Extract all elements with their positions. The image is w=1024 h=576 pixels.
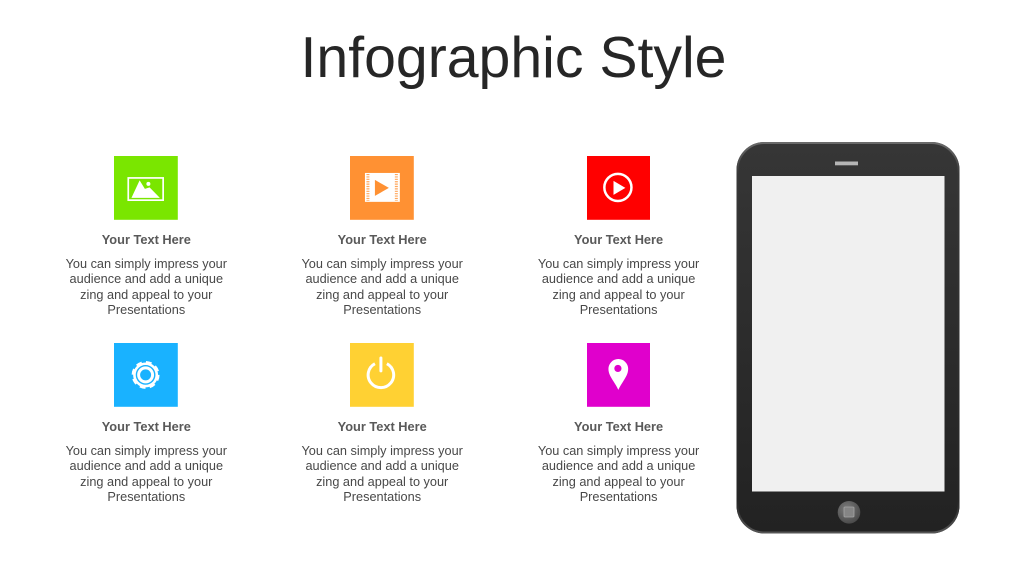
text block: zing and appeal to your [552, 287, 685, 302]
text block: audience and add a unique [542, 271, 695, 286]
text block [66, 443, 227, 504]
text block: You can simply impress your [301, 256, 463, 271]
text block: You can simply impress your [66, 443, 227, 458]
title: Infographic Style [300, 26, 726, 90]
text block: zing and appeal to your [316, 287, 448, 302]
text block: audience and add a unique [70, 271, 223, 286]
text block: You can simply impress your [301, 443, 463, 458]
phone body [736, 142, 960, 534]
text block: You can simply impress your [538, 256, 699, 271]
heading: Your Text Here [574, 232, 663, 247]
text block: Presentations [580, 489, 657, 504]
card: settings [66, 343, 227, 504]
text block: You can simply impress your [538, 443, 699, 458]
heading: Your Text Here [338, 232, 427, 247]
text block: zing and appeal to your [552, 474, 685, 489]
text block: You can simply impress your [66, 256, 227, 271]
text block [66, 256, 227, 317]
text block: Presentations [580, 302, 657, 317]
text block [538, 256, 700, 317]
speaker [835, 162, 858, 165]
card: play [538, 156, 700, 317]
icon: gear [114, 343, 178, 407]
card: image [66, 156, 227, 317]
icon: power [350, 343, 414, 407]
icon: map pin [587, 343, 650, 407]
heading: Your Text Here [338, 419, 427, 434]
card: location [538, 343, 700, 504]
text block: Presentations [107, 489, 185, 504]
text block: zing and appeal to your [316, 474, 448, 489]
text block: audience and add a unique [305, 458, 459, 473]
heading: Your Text Here [102, 419, 191, 434]
text block: Presentations [343, 489, 421, 504]
heading: Your Text Here [574, 419, 663, 434]
text block: zing and appeal to your [80, 287, 212, 302]
text block [301, 443, 463, 504]
text block: audience and add a unique [542, 458, 695, 473]
heading: Your Text Here [102, 232, 191, 247]
icon: play circle [587, 156, 650, 220]
text block: audience and add a unique [305, 271, 459, 286]
icon: image landscape [114, 156, 178, 220]
text block: zing and appeal to your [80, 474, 212, 489]
icon: film play [350, 156, 414, 220]
phone illustration [736, 142, 960, 534]
text block: audience and add a unique [70, 458, 223, 473]
home button [838, 501, 860, 524]
text block: Presentations [107, 302, 185, 317]
card: power [301, 343, 463, 504]
card: video [301, 156, 463, 317]
phone screen [752, 176, 944, 492]
text block [301, 256, 463, 317]
text block: Presentations [343, 302, 421, 317]
text block [538, 443, 700, 504]
